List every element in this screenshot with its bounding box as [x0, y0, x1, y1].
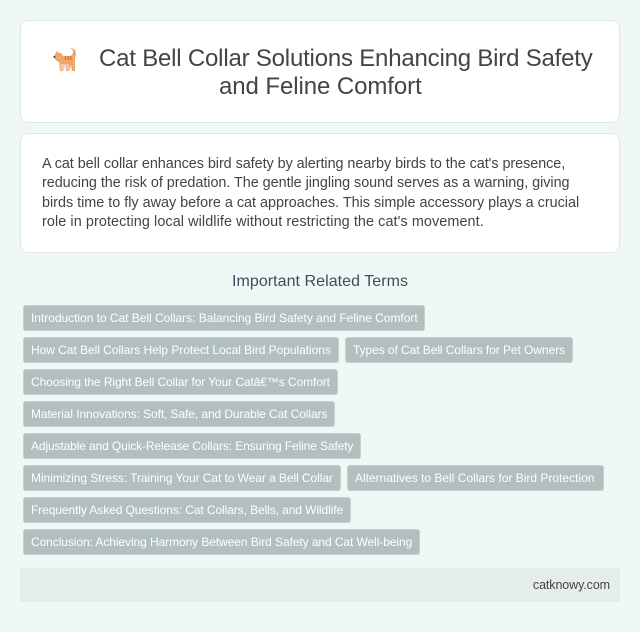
tag 1 [23, 305, 425, 331]
tag 4: Choosing the Right Bell Collar for Your Catâ€™s Comfort [31, 375, 330, 389]
tag 9 [23, 497, 351, 523]
tag 6: Adjustable and Quick-Release Collars: Ensuring Feline Safety [31, 439, 353, 453]
tag 2: How Cat Bell Collars Help Protect Local Bird Populations [31, 343, 331, 357]
panel: title card: and Feline Comfort [219, 73, 422, 100]
footer text: catknowy.com [533, 578, 610, 592]
text block: description: reducing the risk of predation. The gentle jingling sound serves as a warning, giving [42, 175, 570, 191]
text block: description: A cat bell collar enhances bird safety by alerting nearby birds to the cat's presence, [42, 156, 565, 172]
panel: title card [20, 20, 620, 123]
tag 5 [23, 401, 335, 427]
text block: description [42, 156, 579, 230]
tag 7 [23, 465, 341, 491]
title: Cat Bell Collar Solutions Enhancing Bird Safety [99, 45, 593, 72]
icon: cat [54, 48, 76, 71]
tag 8 [347, 465, 604, 491]
heading: related terms: Important Related Terms [232, 273, 408, 290]
tag 3 [345, 337, 573, 363]
text block: description: birds time to fly away before a cat approaches. This simple accessory plays a crucial [42, 195, 579, 211]
tag 6 [23, 433, 361, 459]
tag 9: Frequently Asked Questions: Cat Collars, Bells, and Wildlife [31, 503, 343, 517]
tag 10: Conclusion: Achieving Harmony Between Bird Safety and Cat Well-being [31, 535, 412, 549]
footer bar [20, 568, 620, 602]
tag 2 [23, 337, 339, 363]
tag list [23, 305, 604, 555]
tag 4 [23, 369, 338, 395]
tag 5: Material Innovations: Soft, Safe, and Durable Cat Collars [31, 407, 327, 421]
tag 1: Introduction to Cat Bell Collars: Balancing Bird Safety and Feline Comfort [31, 311, 418, 325]
tag 7: Minimizing Stress: Training Your Cat to Wear a Bell Collar [31, 471, 333, 485]
panel: description [20, 133, 620, 253]
text block: description: role in protecting local wildlife without restricting the cat's movement. [42, 214, 484, 230]
tag 10 [23, 529, 420, 555]
tag 3: Types of Cat Bell Collars for Pet Owners [353, 343, 565, 357]
tag 8: Alternatives to Bell Collars for Bird Protection [355, 471, 594, 485]
